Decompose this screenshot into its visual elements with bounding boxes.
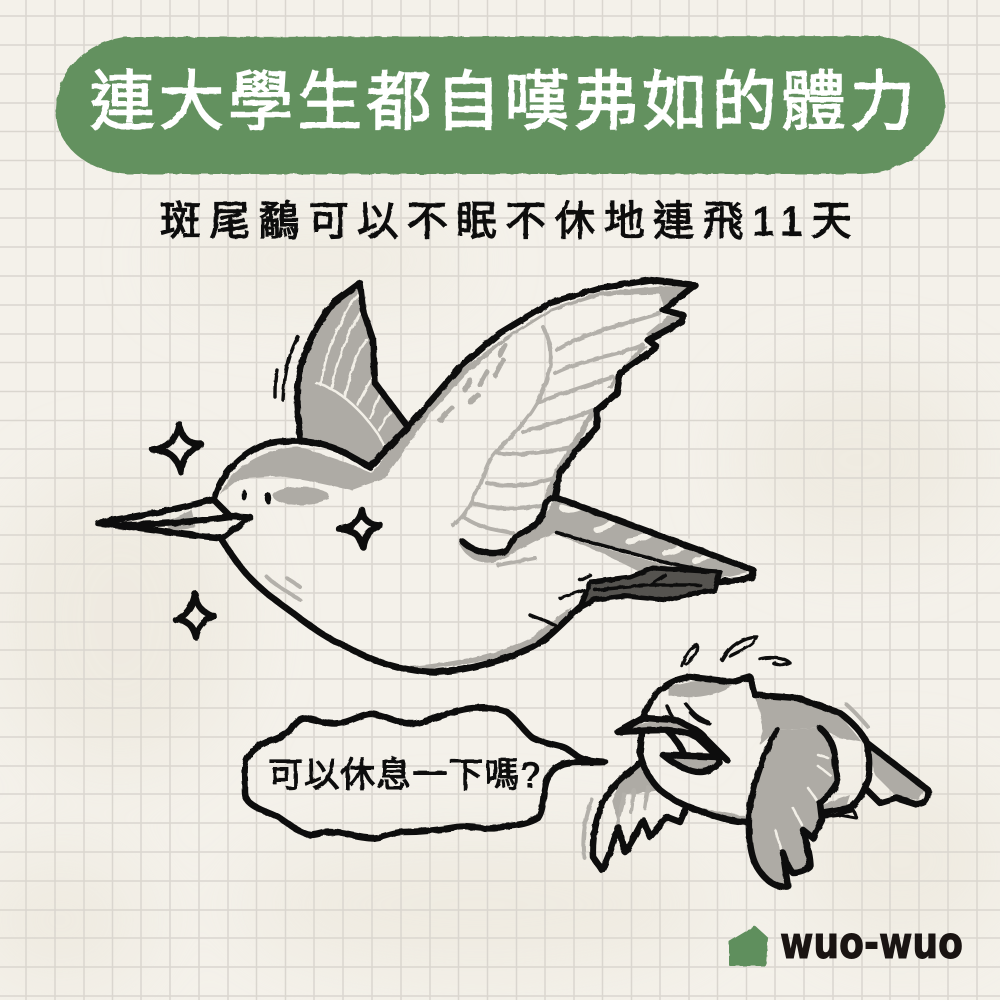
icon: green house: [730, 927, 767, 965]
logo wordmark: wuo-wuo: [780, 918, 963, 969]
far wing: [583, 763, 685, 870]
sweat drops: [682, 637, 790, 666]
sparkle: [339, 510, 380, 547]
feet: [823, 810, 857, 818]
sparkle: [176, 594, 214, 637]
body outline: [640, 677, 869, 822]
back wing: [297, 283, 408, 467]
sparkle: [153, 424, 201, 472]
bird shading: [160, 286, 748, 670]
speech text: 可以休息一下嗎?: [268, 756, 540, 795]
title banner: [56, 36, 945, 174]
closed eye: [666, 704, 710, 724]
subtitle: 斑尾鷸可以不眠不休地連飛11天: [160, 198, 852, 244]
beak: [98, 499, 250, 540]
speech bubble: [245, 708, 605, 838]
dark foot: [530, 568, 720, 625]
body shading: [668, 681, 862, 822]
logo: [730, 918, 963, 969]
eyes: [241, 490, 271, 504]
right wing: [847, 705, 928, 804]
bird outline: [215, 280, 753, 672]
large wing: [749, 728, 837, 887]
motion lines: [275, 337, 298, 400]
wing feathers: [440, 313, 712, 561]
large flying bird: [98, 280, 753, 672]
tired small bird: [583, 637, 928, 887]
title banner: 連大學生都自嘆弗如的體力: [90, 65, 915, 138]
open beak: [618, 718, 727, 775]
